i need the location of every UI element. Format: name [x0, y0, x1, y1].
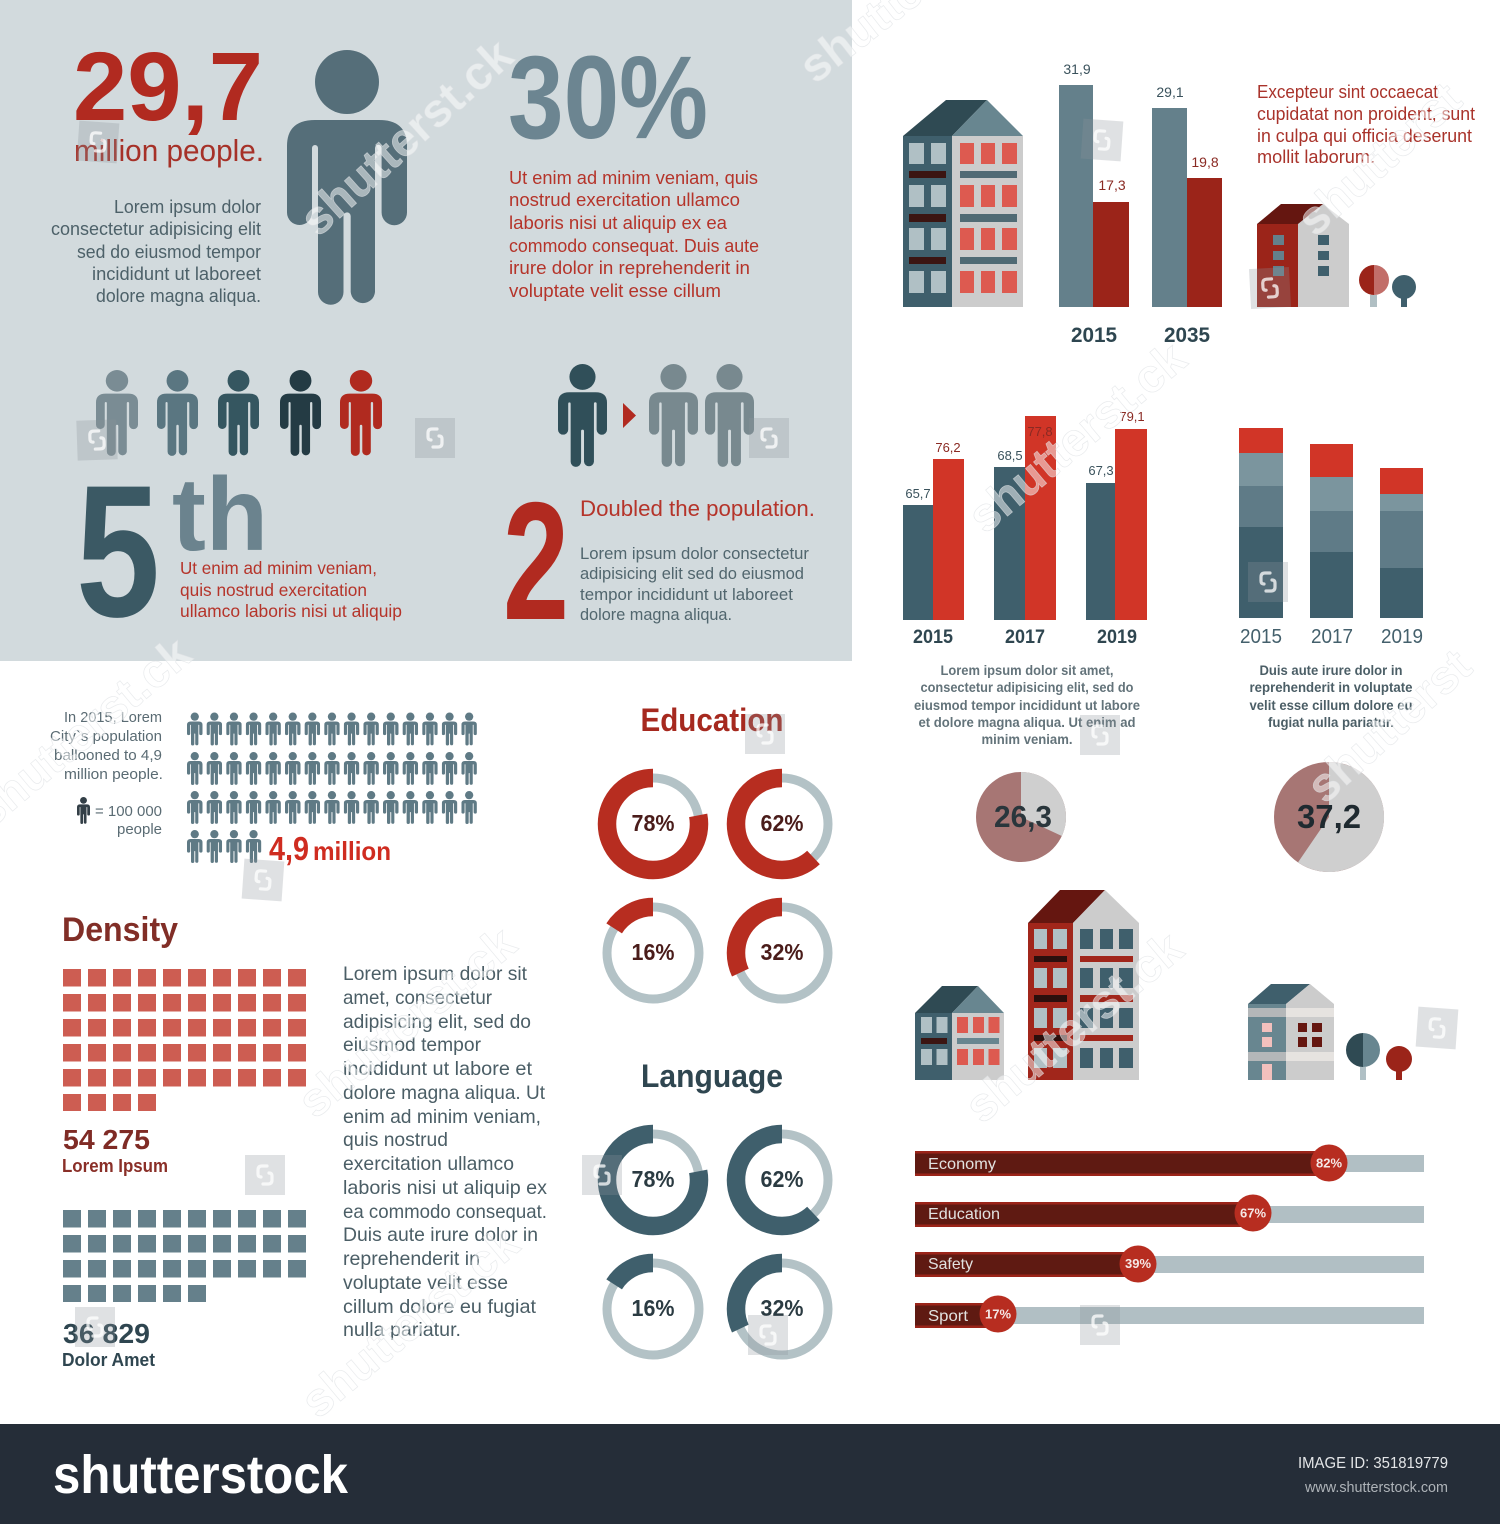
text block: population note: ballooned to 4,9 — [54, 748, 162, 764]
donut charts: education: 78% — [632, 810, 674, 836]
text block: long paragraph: Lorem ipsum dolor sit — [343, 963, 528, 985]
text block: long paragraph: reprehenderit in — [343, 1248, 480, 1270]
stat: 36 829 Dolor Amet: 36 829 — [63, 1318, 150, 1349]
text: shutterst.ck — [954, 920, 1193, 1133]
text block: long paragraph: eiusmod tempor — [343, 1034, 481, 1056]
progress bar: education 67%: 67% — [1240, 1206, 1266, 1220]
text block: grouped chart caption: minim veniam. — [982, 732, 1072, 747]
callout: 4,9 million — [269, 830, 391, 867]
footer image id: www.shutterstock.com — [1304, 1480, 1448, 1496]
text block: 5th description: ullamco laboris nisi ut aliquip — [180, 601, 402, 621]
progress bar: sport 17%: Sport — [928, 1308, 969, 1325]
text block: long paragraph: nulla pariatur. — [343, 1319, 461, 1341]
icon row: five people — [96, 370, 382, 456]
text block: grouped chart caption: eiusmod tempor incididunt ut labore — [914, 698, 1140, 713]
heading: density: Density — [62, 911, 178, 949]
heading: education: Education — [640, 702, 784, 738]
text block: red paragraph: commodo consequat. Duis aute — [509, 235, 759, 256]
bar chart: 2015 vs 2035: 31,9 — [1063, 61, 1091, 77]
panel: population summary background — [0, 0, 852, 661]
donut charts: education: 32% — [760, 939, 804, 965]
donut charts: language: 16% — [632, 1295, 674, 1321]
text block: long paragraph: enim ad minim veniam, — [343, 1106, 541, 1128]
big number: 2: 2 — [503, 467, 569, 655]
text block: stacked chart caption: reprehenderit in voluptate — [1250, 680, 1413, 695]
donut charts: language: 62% — [760, 1166, 804, 1192]
text block: long paragraph: laboris nisi ut aliquip ex — [343, 1177, 547, 1199]
progress bar: economy 82% — [915, 1144, 1424, 1182]
text block: doubled description — [580, 545, 810, 624]
pictogram: red density squares — [63, 969, 306, 1111]
text block: red paragraph: laboris nisi ut aliquip ex ea — [509, 212, 728, 233]
text block: population note — [50, 710, 163, 838]
callout: 4,9 million: million — [313, 836, 391, 866]
big number: 5th: th — [172, 457, 268, 573]
pictogram: grey density squares — [63, 1210, 306, 1302]
text block: red paragraph: Ut enim ad minim veniam, quis — [509, 167, 758, 188]
big number: 29,7 million people: million people. — [74, 133, 264, 168]
text: shutterst — [1296, 638, 1481, 812]
text block: long paragraph: Duis aute irure dolor in — [343, 1224, 538, 1246]
pictogram: population grid — [187, 712, 477, 863]
stat: 36 829 Dolor Amet — [62, 1318, 155, 1370]
footer image id — [1298, 1455, 1448, 1496]
illustration: tall building — [903, 100, 1023, 307]
bar chart: 2015 vs 2035: 19,8 — [1191, 154, 1219, 170]
icon: legend person — [77, 797, 90, 824]
progress bar: education 67% — [915, 1194, 1424, 1232]
text block: stacked chart caption — [1250, 663, 1413, 730]
text block: red paragraph — [509, 167, 759, 301]
bar chart: grouped 2015 2017 2019 — [903, 409, 1147, 648]
bar chart: stacked 2015 2017 2019 — [1239, 428, 1423, 648]
text block: doubled description: Lorem ipsum dolor consectetur — [580, 545, 810, 563]
big number: 5th: 5 — [76, 446, 160, 656]
icon: one person doubling to two — [558, 364, 754, 467]
progress bar: education 67%: Education — [928, 1206, 1000, 1223]
pie chart: 37,2 — [1274, 762, 1384, 872]
progress bar: sport 17%: 17% — [985, 1306, 1011, 1322]
text block: 5th description — [180, 558, 402, 621]
progress bar: economy 82%: 82% — [1316, 1156, 1342, 1170]
text block: grouped chart caption — [914, 663, 1140, 747]
bar chart: grouped 2015 2017 2019: 2015 — [913, 627, 953, 648]
bar chart: grouped 2015 2017 2019: 2017 — [1005, 627, 1045, 648]
text block: grouped chart caption: Lorem ipsum dolor sit amet, — [940, 663, 1114, 678]
text block: lorem intro: consectetur adipisicing elit — [51, 218, 261, 239]
footer bar — [0, 1424, 1500, 1524]
text block: doubled description: tempor incididunt ut laboreet — [580, 586, 793, 604]
illustration: small teal building — [915, 986, 1004, 1080]
text block: lorem intro — [51, 196, 261, 306]
heading: language: Language — [641, 1058, 783, 1094]
pie chart: 26,3: 26,3 — [994, 799, 1052, 834]
text block: long paragraph: ea commodo consequat. — [343, 1201, 547, 1223]
footer logo: shutterstock — [53, 1445, 349, 1505]
footer image id: IMAGE ID: 351819779 — [1298, 1455, 1448, 1472]
stat: 54 275 Lorem Ipsum: 54 275 — [63, 1124, 150, 1155]
text block: long paragraph — [343, 963, 547, 1341]
bar chart: 2015 vs 2035: 2035 — [1164, 324, 1210, 347]
stat: 54 275 Lorem Ipsum: Lorem Ipsum — [62, 1156, 168, 1176]
text block: population note: people — [117, 822, 162, 838]
stat: 36 829 Dolor Amet: Dolor Amet — [62, 1350, 155, 1370]
bar chart: grouped 2015 2017 2019: 67,3 — [1088, 463, 1114, 478]
text block: lorem intro: Lorem ipsum dolor — [114, 196, 261, 217]
progress bar: sport 17% — [915, 1296, 1424, 1332]
bar chart: stacked 2015 2017 2019: 2015 — [1240, 626, 1282, 648]
donut charts: education: 62% — [760, 810, 804, 836]
text block: doubled description: adipisicing elit sed do eiusmod — [580, 565, 804, 583]
text block: stacked chart caption: velit esse cillum dolore eu — [1250, 698, 1412, 713]
icon: large person — [287, 50, 407, 305]
text block: excepteur: mollit laborum. — [1257, 147, 1375, 167]
text block: stacked chart caption: Duis aute irure dolor in — [1260, 663, 1402, 678]
text block: grouped chart caption: et dolore magna aliqua. Ut enim ad — [918, 715, 1136, 730]
text block: long paragraph: dolore magna aliqua. Ut — [343, 1082, 546, 1104]
callout: 4,9 million: 4,9 — [269, 830, 309, 867]
progress bar: safety 39%: 39% — [1125, 1256, 1151, 1271]
text block: excepteur — [1257, 82, 1475, 167]
donut charts: language: 32% — [760, 1295, 804, 1321]
bar chart: grouped 2015 2017 2019: 2019 — [1097, 627, 1137, 648]
illustration: tall red building — [1028, 890, 1139, 1080]
bar chart: 2015 vs 2035: 2015 — [1071, 324, 1117, 347]
text: shutterst.ck — [957, 330, 1196, 543]
progress bar: safety 39%: Safety — [928, 1256, 973, 1273]
text block: lorem intro: sed do eiusmod tempor — [77, 241, 261, 262]
text block: population note: City`s population — [50, 729, 162, 745]
text block: lorem intro: incididunt ut laboreet — [92, 263, 261, 284]
bar chart: 2015 vs 2035: 17,3 — [1098, 177, 1126, 193]
text block: long paragraph: incididunt ut labore et — [343, 1058, 533, 1080]
text block: long paragraph: voluptate velit esse — [343, 1272, 508, 1294]
donut charts: education — [607, 778, 828, 999]
donut charts: education: 16% — [632, 939, 674, 965]
bar chart: grouped 2015 2017 2019: 77,8 — [1027, 424, 1053, 439]
text block: red paragraph: voluptate velit esse cillum — [509, 280, 721, 301]
text block: long paragraph: exercitation ullamco — [343, 1153, 514, 1175]
illustration: small house with trees — [1248, 984, 1412, 1080]
text: shutterst.ck — [290, 1215, 529, 1428]
stat: 54 275 Lorem Ipsum — [62, 1124, 168, 1176]
text: shutterst.ck — [289, 27, 523, 245]
illustration: small red house and trees — [1257, 204, 1416, 307]
text block: 5th description: quis nostrud exercitation — [180, 580, 367, 600]
text block: long paragraph: cillum dolore eu fugiat — [343, 1296, 537, 1318]
text block: population note: In 2015, Lorem — [64, 710, 162, 726]
bar chart: grouped 2015 2017 2019: 76,2 — [935, 440, 961, 455]
progress bar: safety 39% — [915, 1246, 1424, 1282]
text block: stacked chart caption: fugiat nulla pariatur. — [1268, 715, 1394, 730]
text block: red paragraph: irure dolor in reprehenderit in — [509, 257, 750, 278]
heading: doubled the population: Doubled the population. — [580, 496, 815, 521]
text block: long paragraph: adipisicing elit, sed do — [343, 1011, 531, 1033]
text block: excepteur: Excepteur sint occaecat — [1257, 82, 1438, 102]
pie chart: 37,2: 37,2 — [1297, 798, 1361, 835]
bar chart: 2015 vs 2035: 29,1 — [1156, 84, 1184, 100]
text block: population note: million people. — [64, 767, 163, 783]
text block: excepteur: cupidatat non proident, sunt — [1257, 104, 1475, 124]
big number: 30%: 30% — [508, 32, 708, 164]
bar chart: stacked 2015 2017 2019: 2019 — [1381, 626, 1423, 648]
progress bar: economy 82%: Economy — [928, 1156, 996, 1173]
big number: 29,7 million people: 29,7 — [73, 32, 263, 141]
text block: long paragraph: quis nostrud — [343, 1129, 448, 1151]
text block: excepteur: in culpa qui officia deserunt — [1257, 126, 1472, 146]
text block: long paragraph: amet, consectetur — [343, 987, 492, 1009]
text: shutterst — [1286, 71, 1471, 245]
bar chart: grouped 2015 2017 2019: 79,1 — [1119, 409, 1145, 424]
text block: red paragraph: nostrud exercitation ullamco — [509, 189, 740, 210]
text block: population note: = 100 000 — [95, 804, 162, 820]
pie chart: 26,3 — [976, 772, 1066, 862]
text block: grouped chart caption: consectetur adipisicing elit, sed do — [920, 680, 1134, 695]
bar chart: grouped 2015 2017 2019: 68,5 — [997, 448, 1023, 463]
text block: doubled description: dolore magna aliqua. — [580, 606, 732, 624]
donut charts: language: 78% — [632, 1166, 674, 1192]
bar chart: 2015 vs 2035 — [1059, 61, 1222, 347]
text block: 5th description: Ut enim ad minim veniam, — [180, 558, 377, 578]
bar chart: stacked 2015 2017 2019: 2017 — [1311, 626, 1353, 648]
donut charts: language — [607, 1134, 828, 1355]
bar chart: grouped 2015 2017 2019: 65,7 — [905, 486, 931, 501]
text: shutterst.ck — [287, 915, 526, 1128]
big number: 5th — [76, 446, 268, 656]
text block: lorem intro: dolore magna aliqua. — [96, 285, 261, 306]
